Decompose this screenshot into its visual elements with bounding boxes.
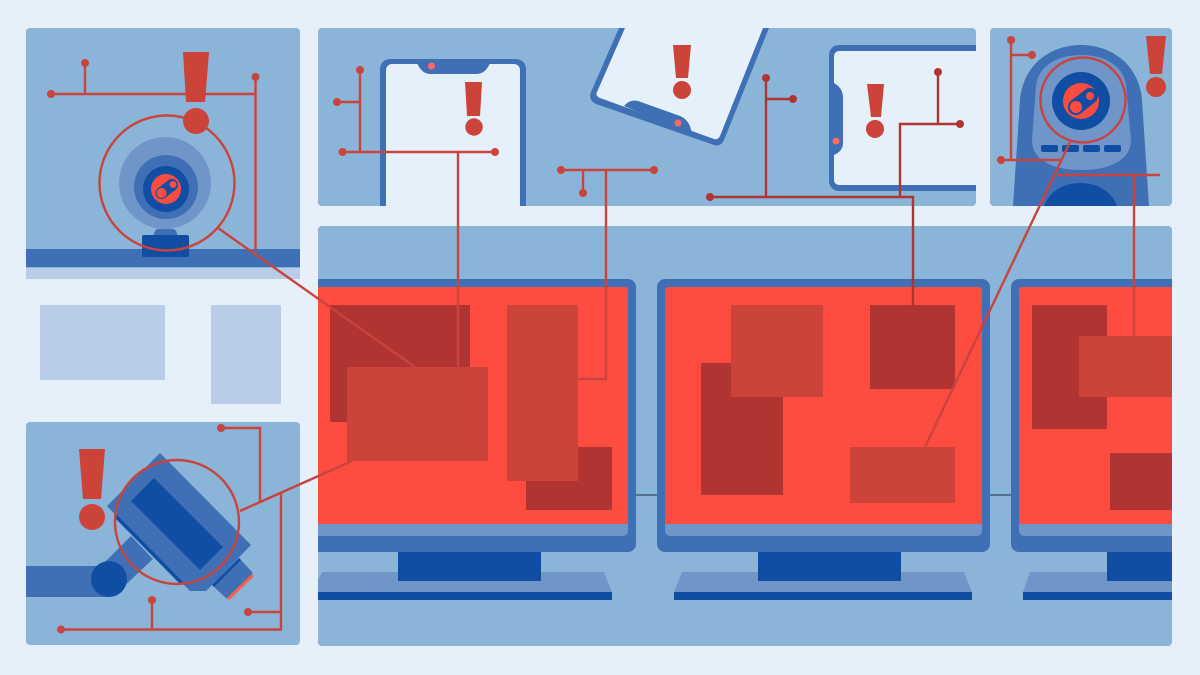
panel: phones xyxy=(318,28,976,206)
monitor 2 xyxy=(657,279,990,600)
icon: exclamation mark xyxy=(183,52,209,134)
panel: security camera xyxy=(26,422,300,645)
icon: upright phone xyxy=(380,59,526,206)
icon: sideways phone xyxy=(829,45,976,191)
monitor 1 xyxy=(318,279,636,600)
monitor connectors xyxy=(636,494,1011,496)
icon: smart speaker xyxy=(1013,45,1149,206)
circuit lines linking devices to monitors xyxy=(218,36,1160,511)
panel: webcam xyxy=(26,28,300,279)
panel: smart speaker xyxy=(990,28,1172,206)
icon: webcam xyxy=(119,137,211,257)
decorative placeholder blocks xyxy=(40,305,281,404)
monitor 3 xyxy=(1011,279,1172,600)
icon: exclamation mark xyxy=(79,449,105,530)
icon: tilted phone xyxy=(590,28,769,145)
webcam circuit lines xyxy=(47,59,260,250)
icon: exclamation mark xyxy=(1146,36,1166,97)
webcam highlight ring xyxy=(100,116,234,250)
icon: security camera xyxy=(26,453,253,599)
panel: monitors xyxy=(318,226,1172,646)
camera circuit lines xyxy=(57,424,281,634)
speaker highlight ring xyxy=(1040,58,1126,142)
camera highlight ring xyxy=(115,460,239,584)
